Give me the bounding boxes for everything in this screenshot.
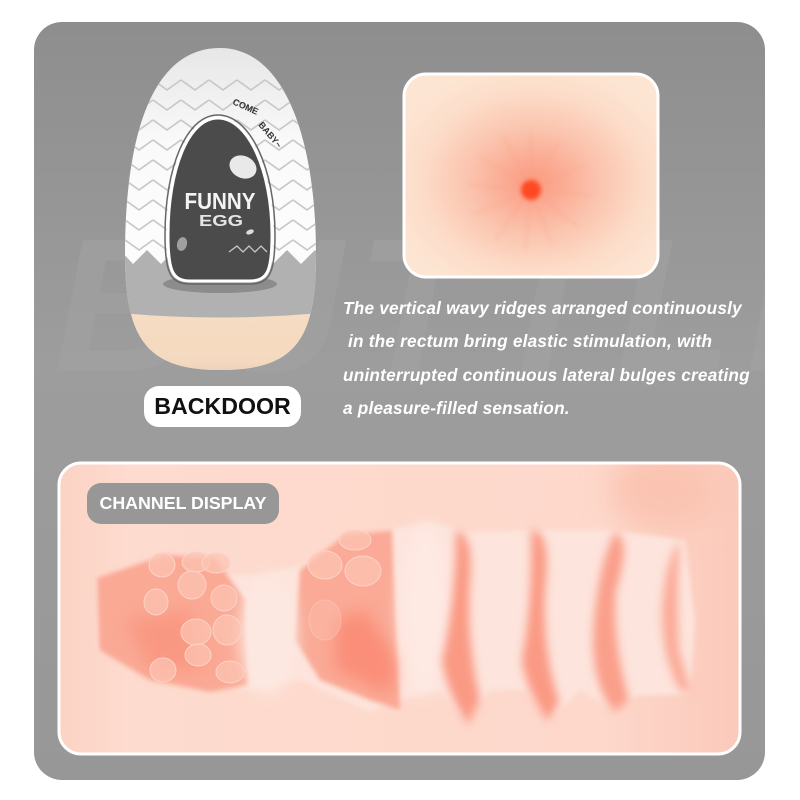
left blob (97, 555, 248, 692)
corner tint (606, 464, 710, 530)
ridges (442, 530, 480, 725)
dark egg window: EGG (199, 213, 243, 230)
highlight spots (226, 151, 260, 183)
description text: uninterrupted continuous lateral bulges creating (343, 365, 750, 385)
grey band (120, 250, 320, 320)
pale fade between blobs (240, 575, 296, 695)
description text: in the rectum bring elastic stimulation, with (348, 331, 712, 351)
label: backdoor (144, 386, 301, 427)
second blob (295, 530, 400, 710)
description text: a pleasure-filled sensation. (343, 398, 570, 418)
label: channel display (87, 483, 279, 524)
radial folds (468, 130, 592, 250)
description text (343, 298, 750, 418)
zigzag pattern (120, 76, 320, 256)
panel: entrance photo (402, 72, 660, 278)
label: backdoor: BACKDOOR (154, 393, 291, 419)
curved slogan (231, 97, 284, 150)
product egg illustration (125, 48, 316, 370)
egg upper white area (120, 45, 320, 375)
window shadow (163, 275, 277, 293)
curved slogan: COME (231, 97, 260, 117)
description text: The vertical wavy ridges arranged continuously (343, 298, 742, 318)
label: channel display: CHANNEL DISPLAY (100, 493, 266, 513)
brand text: FUNNY (184, 188, 256, 214)
red centre (521, 180, 541, 200)
nodules (144, 530, 381, 683)
dark egg window (165, 115, 275, 284)
panel: channel display (58, 462, 742, 756)
pale channel body (230, 524, 696, 718)
curved slogan: BABY~ (256, 120, 284, 150)
peach base (131, 314, 310, 370)
